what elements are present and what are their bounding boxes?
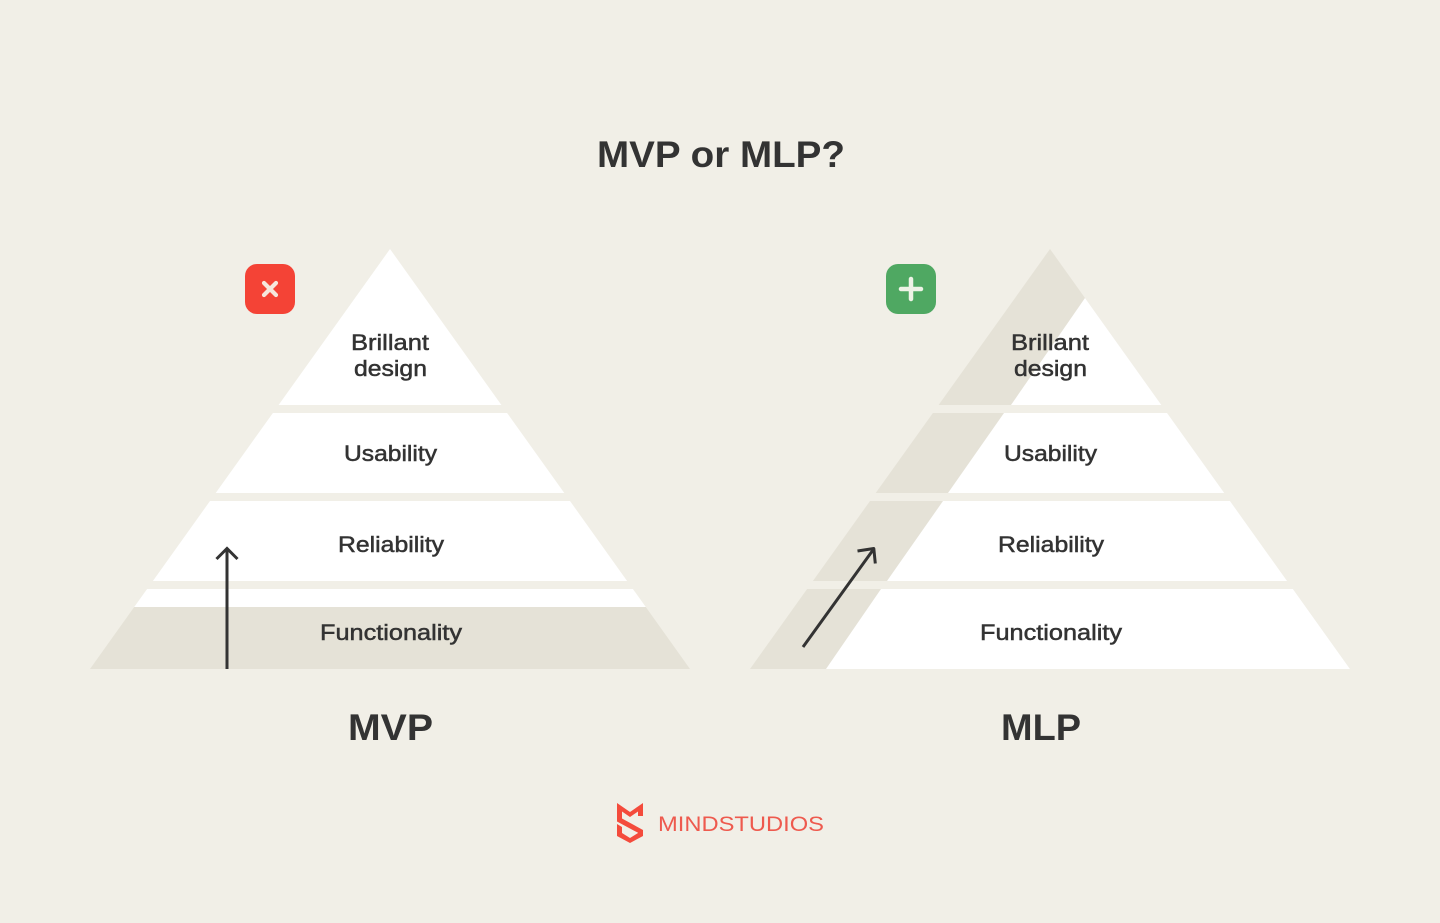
title: MVP or MLP? [597, 134, 845, 175]
panel: MVP pyramid [90, 249, 690, 669]
tier: Functionality [750, 589, 1350, 669]
tier: Functionality: Functionality [320, 620, 462, 645]
arrow: diagonal [803, 548, 875, 647]
logo: Mind Studios [617, 803, 824, 843]
tier: Usability [216, 413, 564, 493]
tier: Brillant design [939, 249, 1161, 405]
arrow: vertical [216, 548, 238, 669]
tier: Reliability: Reliability [998, 532, 1104, 557]
label: MVP: MVP [348, 707, 433, 748]
tier: Usability: Usability [1004, 441, 1097, 466]
tier: Usability: Usability [344, 441, 437, 466]
tier: Reliability: Reliability [338, 532, 444, 557]
tier: Reliability [153, 501, 627, 581]
tier: Usability [876, 413, 1224, 493]
tier: Brillant design: design [354, 356, 427, 381]
label: MLP: MLP [1001, 707, 1081, 748]
tier: Brillant design [279, 249, 501, 405]
icon: red cross badge [245, 264, 295, 314]
tier: Brillant design: design [1014, 356, 1087, 381]
icon: shield logo [617, 803, 643, 843]
icon: green plus badge [886, 264, 936, 314]
tier: Brillant design: Brillant [1011, 330, 1089, 355]
tier: Functionality [90, 589, 690, 669]
tier: Functionality: Functionality [980, 620, 1122, 645]
panel: MLP pyramid [750, 249, 1350, 669]
tier: Reliability [813, 501, 1287, 581]
wordmark: MIND STUDIOS [658, 813, 824, 836]
tier: Brillant design: Brillant [351, 330, 429, 355]
